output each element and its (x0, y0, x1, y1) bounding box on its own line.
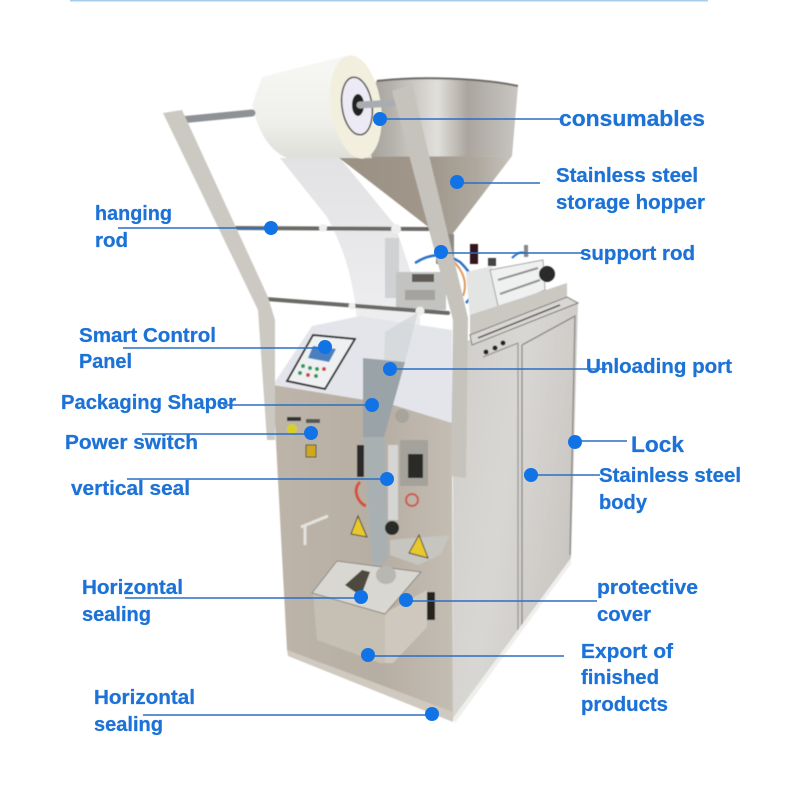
label: protective cover: cover (597, 604, 651, 626)
power switch (287, 417, 320, 457)
label: protective cover (399, 577, 698, 626)
machine body: side panel (453, 283, 578, 723)
label: consumables: consumables (559, 106, 705, 131)
hanging rods (180, 103, 448, 316)
label: smart control panel: Smart Control (79, 325, 216, 347)
label: unloading port (383, 356, 732, 378)
sealing jaws (356, 409, 428, 535)
label: stainless steel storage hopper: Stainless steel (556, 165, 698, 187)
machine body: sloping top (273, 316, 452, 423)
label: smart control panel (79, 325, 332, 373)
horizontal sealing platter (312, 561, 421, 614)
machine illustration (163, 52, 578, 723)
warning signs (351, 516, 428, 558)
filler valve block (385, 238, 496, 310)
label: packaging shaper: Packaging Shaper (61, 392, 236, 414)
label: export of finished products: Export of (581, 641, 673, 663)
label: hanging rod: hanging (95, 203, 172, 225)
label: smart control panel: Panel (79, 351, 132, 373)
label: horizontal sealing (lower): Horizontal (94, 687, 195, 709)
recessed tray (390, 535, 450, 565)
label: stainless steel storage hopper (450, 165, 705, 214)
label: hanging rod (95, 203, 278, 252)
label: stainless steel storage hopper: storage hopper (556, 192, 705, 214)
label: vertical seal (71, 472, 394, 500)
label: unloading port: Unloading port (586, 356, 732, 378)
label: consumables (373, 106, 705, 131)
label: power switch (65, 426, 318, 454)
label: stainless steel body (524, 465, 741, 514)
label: protective cover: protective (597, 577, 698, 599)
label: lock (568, 432, 685, 457)
right frame arm (392, 84, 468, 478)
packaging shaper (363, 358, 405, 437)
label: lock: Lock (631, 432, 685, 457)
film web (280, 158, 420, 330)
label: support rod: support rod (580, 243, 695, 265)
label: stainless steel body: Stainless steel (599, 465, 741, 487)
side handle (301, 516, 328, 545)
control panel (287, 335, 355, 389)
label: export of finished products: products (581, 694, 668, 716)
side latch (427, 592, 435, 620)
label: horizontal sealing (lower): sealing (94, 714, 163, 736)
label: horizontal sealing (lower) (94, 687, 439, 736)
label: packaging shaper (61, 392, 379, 414)
label: export of finished products: finished (581, 667, 659, 689)
label: horizontal sealing (upper): Horizontal (82, 577, 183, 599)
label: vertical seal: vertical seal (71, 478, 190, 500)
label: horizontal sealing (upper): sealing (82, 604, 151, 626)
vertical seal strip (363, 437, 388, 568)
piston pump (466, 245, 555, 318)
top border line (70, 0, 708, 2)
film roll (252, 52, 388, 162)
storage hopper (338, 78, 518, 264)
label: horizontal sealing (upper) (82, 577, 368, 626)
label: power switch: Power switch (65, 432, 198, 454)
label: hanging rod: rod (95, 230, 128, 252)
discharge box (313, 590, 427, 663)
label: stainless steel body: body (599, 492, 648, 514)
label: support rod (434, 243, 695, 265)
base plate (287, 650, 453, 722)
label: export of finished products (361, 641, 673, 716)
machine body: front panel (273, 385, 453, 718)
left frame arm (163, 110, 275, 440)
